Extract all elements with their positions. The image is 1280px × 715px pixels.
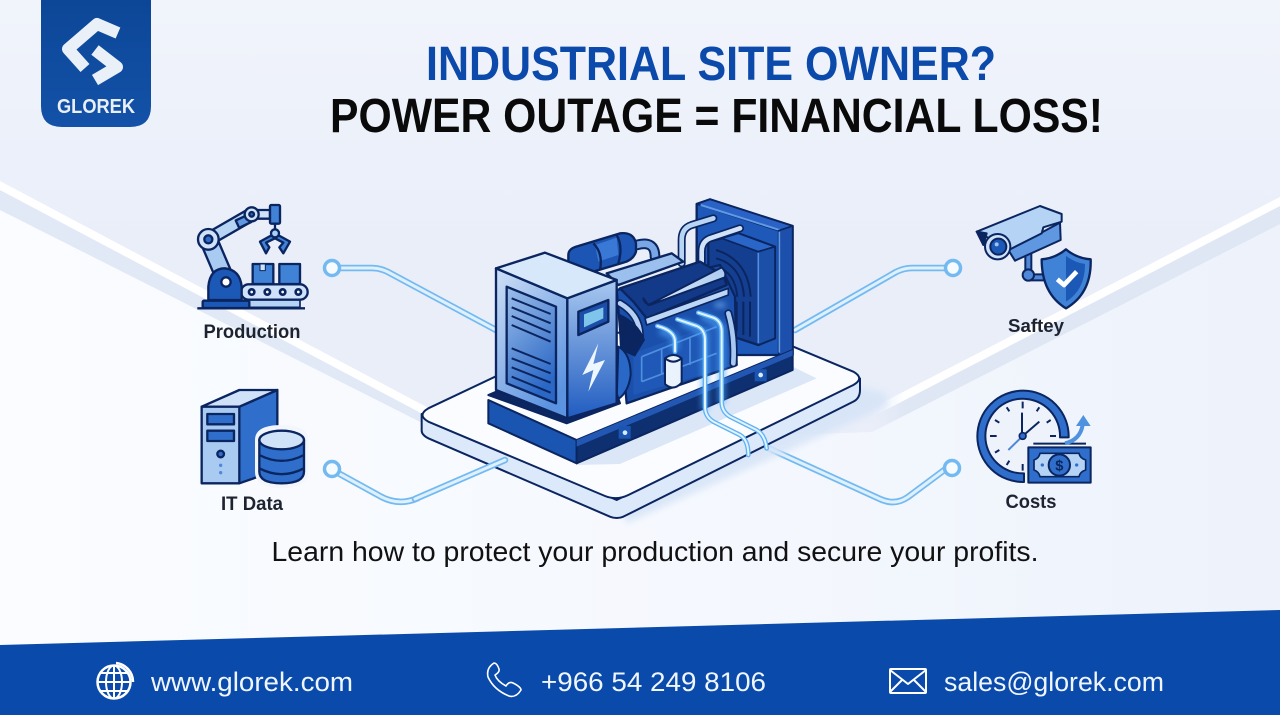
cable glow (660, 302, 726, 410)
icon: clock and money: $ (1055, 459, 1063, 475)
logo mark (68, 24, 118, 80)
icon: robot arm (197, 205, 308, 308)
title: POWER OUTAGE = FINANCIAL LOSS! (330, 90, 1103, 143)
icon: clock and money (977, 391, 1091, 483)
lightning bolt (582, 343, 605, 392)
phone number: +966 54 249 8106 (541, 667, 766, 697)
logo (41, 0, 151, 127)
icon: phone (488, 663, 521, 696)
footer band (0, 610, 1280, 715)
IT data connector end on platform (415, 460, 505, 499)
generator base (488, 350, 793, 463)
capacitor (665, 355, 682, 388)
label: Production: Production (204, 322, 300, 343)
alternator (618, 313, 645, 357)
generator on platform (422, 199, 887, 523)
tagline: Learn how to protect your production and secure your profits. (272, 536, 1038, 567)
control cabinet (496, 253, 617, 418)
cables (657, 313, 767, 455)
radiator back frame (697, 199, 793, 355)
website: www.glorek.com (150, 667, 353, 697)
upper pipes (637, 218, 740, 270)
platform (422, 330, 860, 518)
label: Saftey: Saftey (1008, 315, 1065, 336)
title: INDUSTRIAL SITE OWNER? (426, 38, 996, 91)
icon: server and database (202, 390, 307, 487)
screen (578, 300, 608, 335)
logo wordmark: GLOREK (57, 96, 136, 118)
vent panel (507, 287, 556, 403)
icon: globe (98, 663, 133, 698)
platform shadow (620, 387, 887, 523)
label: IT Data: IT Data (221, 494, 283, 515)
title (330, 38, 1103, 143)
label: Costs: Costs (1006, 492, 1056, 513)
engine block (607, 253, 737, 403)
engine side pipes (620, 303, 734, 363)
email: sales@glorek.com (944, 667, 1164, 697)
connector lines (324, 260, 960, 502)
air filter cylinder (568, 233, 636, 273)
icon: envelope (890, 669, 926, 693)
icon: camera and shield (977, 206, 1091, 308)
